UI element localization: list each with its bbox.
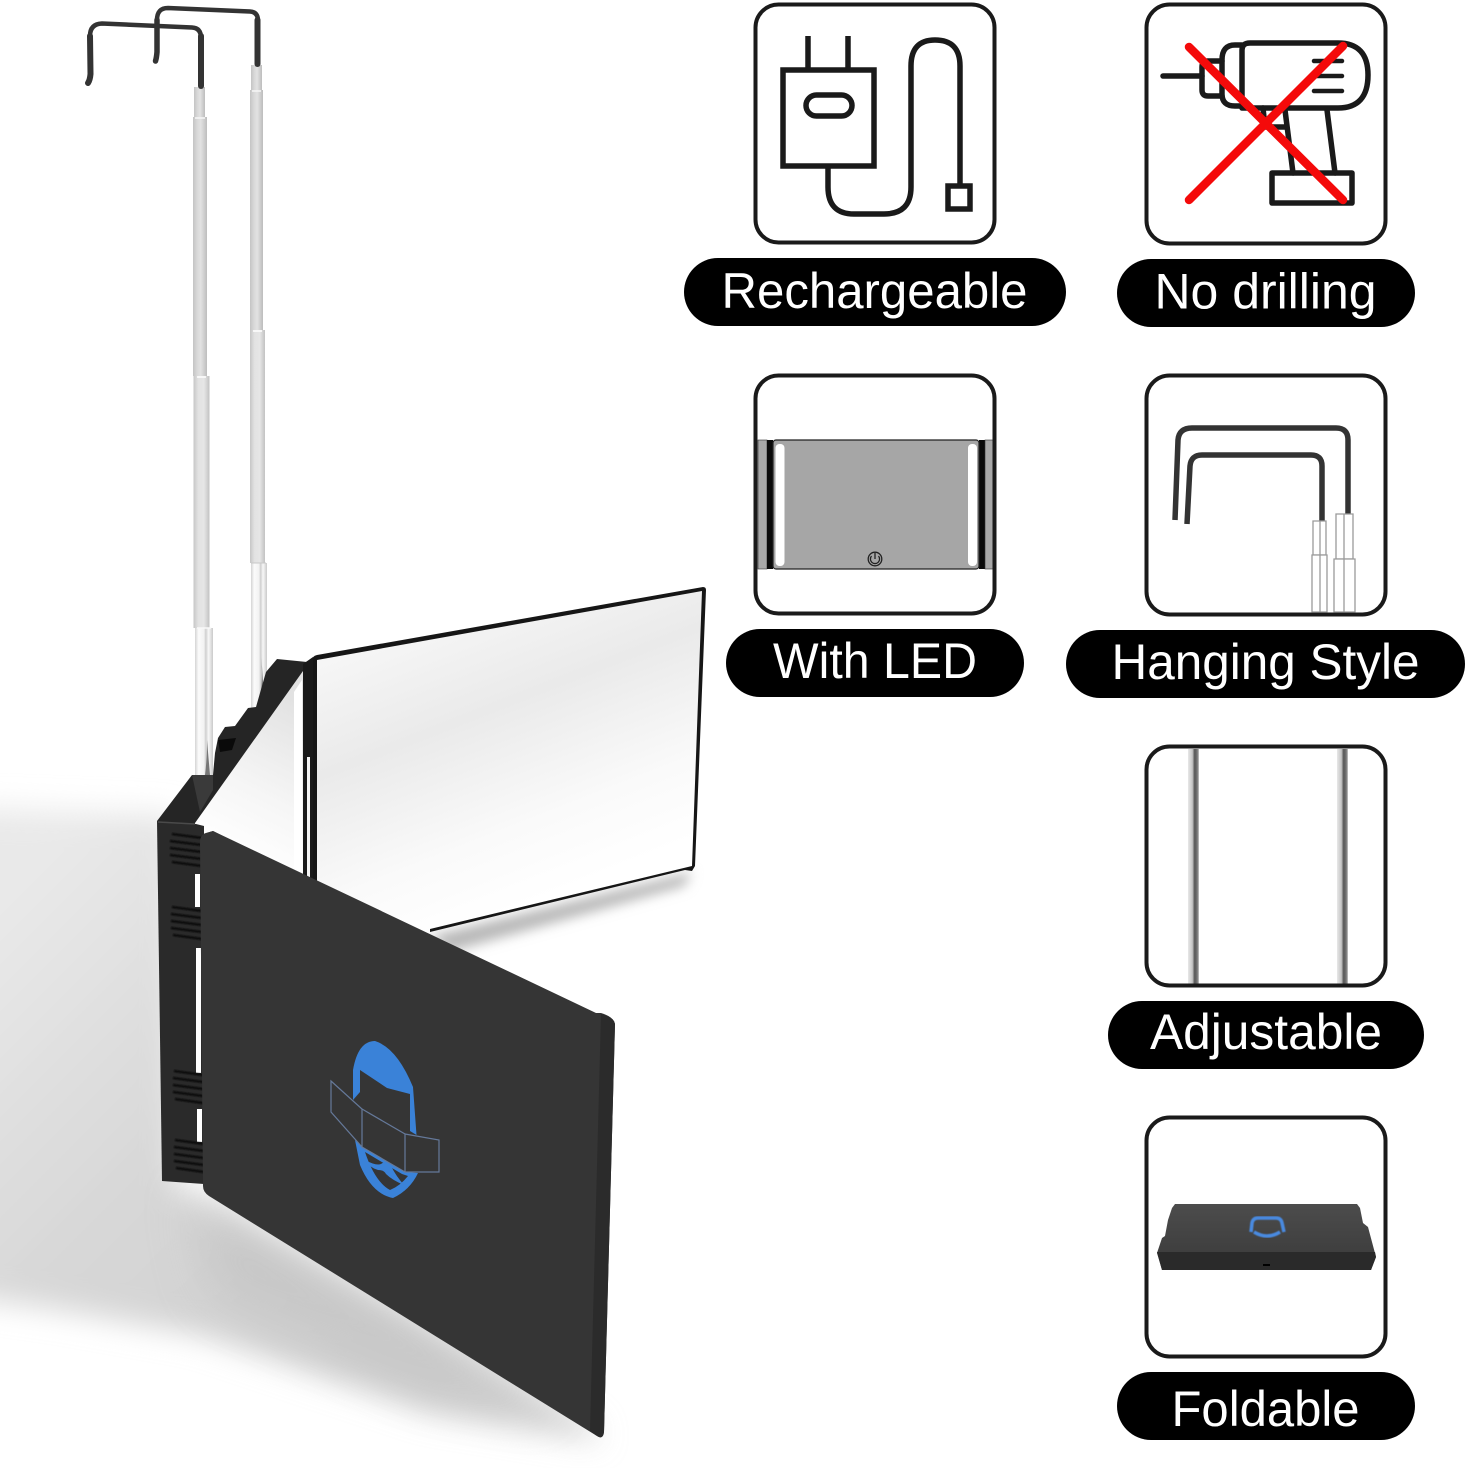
icon: hooks: [1146, 376, 1386, 614]
rod right: [250, 65, 267, 708]
label: Adjustable: Adjustable: [1150, 1004, 1382, 1060]
icon: crossed drill: [1146, 4, 1386, 244]
feature: With LED: [726, 376, 1024, 697]
feature: Hanging Style: [1066, 376, 1465, 698]
label: Adjustable: [1108, 1001, 1424, 1069]
floor shadow: [0, 806, 600, 1440]
icon: folded mirror: [1146, 1118, 1386, 1356]
logo: blue head with mirror outline: [331, 1041, 439, 1198]
label: Rechargeable: [684, 258, 1066, 326]
icon: charger: [756, 4, 994, 242]
label: Hanging Style: Hanging Style: [1112, 634, 1420, 690]
hinge strip: [303, 657, 313, 885]
shadow under right mirror: [430, 872, 692, 952]
hook front: [88, 24, 201, 86]
product: middle panel with top frame: [157, 657, 313, 885]
label: With LED: With LED: [773, 633, 977, 689]
feature: Adjustable: [1108, 746, 1424, 1069]
label: No drilling: [1117, 259, 1415, 327]
label: Rechargeable: Rechargeable: [722, 263, 1028, 319]
feature: Rechargeable: [684, 4, 1066, 326]
label: Hanging Style: [1066, 630, 1465, 698]
product: side frame with vents: [157, 821, 204, 1184]
label: No drilling: No drilling: [1154, 264, 1376, 320]
feature: Foldable: [1117, 1118, 1415, 1440]
product: right mirror panel: [312, 587, 706, 950]
icon: telescoping rods: [1146, 746, 1386, 986]
label: With LED: [726, 629, 1024, 697]
label: Foldable: Foldable: [1172, 1381, 1360, 1437]
rod left: [193, 87, 213, 776]
product: front panel back cover: [200, 831, 615, 1437]
icon: LED mirror: [756, 376, 994, 614]
product: telescoping hanger rods and hooks: [88, 8, 267, 776]
label: Foldable: [1117, 1372, 1415, 1440]
feature: No drilling: [1117, 4, 1415, 327]
hook back: [156, 8, 258, 64]
